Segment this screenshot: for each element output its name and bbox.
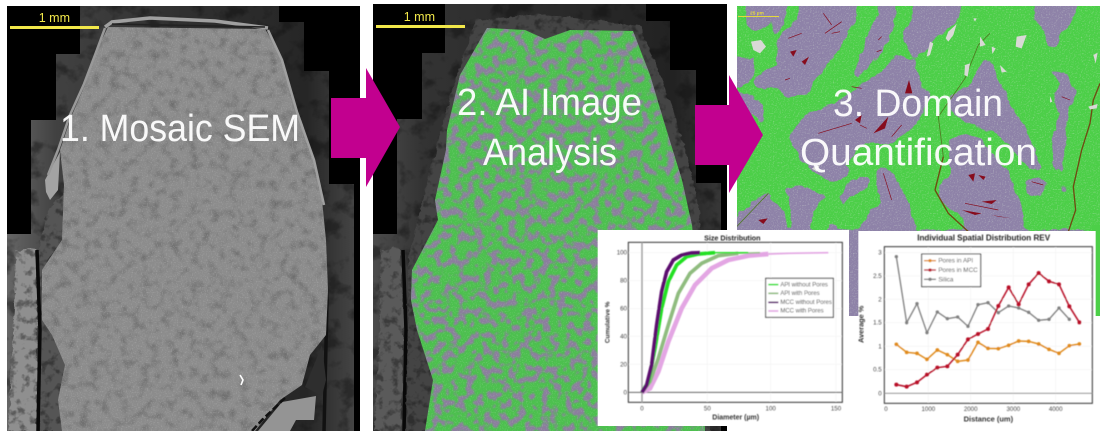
legend: API with Pores [780, 291, 820, 297]
scale bar: 25 µm, panel 3: 25 µm [750, 10, 764, 16]
legend: MCC with Pores [780, 309, 824, 315]
pores and cracks [737, 13, 1100, 232]
series: silica [895, 255, 1071, 334]
x axis labels: 100 [766, 405, 776, 412]
legend [922, 254, 981, 287]
outer grey strip [374, 248, 403, 431]
x axis labels [884, 406, 1063, 413]
y axis labels: 2 [878, 296, 882, 303]
rim of specimen [105, 18, 268, 28]
panel: mosaic SEM image [7, 6, 360, 431]
y axis labels: 0.5 [873, 367, 882, 374]
y axis labels: 0 [624, 389, 628, 396]
lower right fragment [258, 396, 316, 431]
grain overlay [737, 6, 1100, 316]
purple domains [725, 0, 1088, 320]
legend: Silica [938, 276, 954, 283]
heading: 2. AI Image Analysis: 2. AI Image [457, 82, 642, 124]
y axis title: Average % [857, 305, 866, 343]
legend [766, 278, 833, 317]
y axis labels [873, 250, 882, 397]
chart title: Individual Spatial Distribution REV [917, 234, 1051, 243]
legend: API without Pores [780, 282, 828, 288]
chart title: Size Distribution [704, 235, 761, 243]
heading: 3. Domain Quantification [800, 83, 1037, 174]
scale bar: 25 µm, panel 3 [738, 10, 779, 17]
scale bar: 1 mm, panel 2 [376, 10, 465, 28]
curve: API without pores [642, 253, 715, 392]
y axis labels: 1.5 [873, 320, 882, 327]
x axis labels: 4000 [1049, 406, 1063, 413]
x axis labels: 1000 [921, 406, 936, 413]
mosaic background tiles [7, 6, 354, 431]
segmented specimen [411, 28, 705, 431]
y axis labels: 2.5 [873, 273, 882, 280]
y axis labels [617, 250, 628, 396]
arrow: step 1 to step 2 [331, 68, 400, 187]
legend: Pores in API [938, 258, 973, 265]
y axis labels: 0 [878, 390, 882, 397]
rough dark edge band [36, 192, 65, 431]
silica particles [751, 18, 1098, 172]
x axis title: Diameter (µm) [712, 415, 759, 422]
y axis labels: 100 [617, 250, 628, 257]
y axis labels: 1 [878, 343, 882, 350]
x axis labels [640, 405, 842, 412]
y axis labels: 40 [620, 333, 628, 340]
heading: 2. AI Image Analysis [457, 82, 642, 174]
upper left sleeve [45, 152, 60, 200]
legend: MCC without Pores [780, 300, 832, 306]
x axis labels: 2000 [964, 406, 978, 413]
y axis labels: 20 [620, 361, 628, 368]
dark band around specimen [406, 14, 710, 431]
legend: Pores in MCC [938, 267, 978, 274]
curve: MCC without pores [642, 253, 700, 392]
x axis labels: 3000 [1006, 406, 1021, 413]
scale bar: 1 mm, panel 2: 1 mm [404, 10, 435, 24]
y axis labels: 80 [620, 278, 628, 285]
panel: AI image analysis [373, 4, 727, 431]
series: pores in MCC [894, 271, 1081, 389]
chart: individual spatial distribution REV [857, 231, 1096, 426]
right strip of green beside chart [1092, 225, 1100, 316]
x axis labels: 0 [640, 405, 644, 412]
scale bar: 1 mm, panel 1: 1 mm [39, 11, 70, 25]
heading: 3. Domain Quantification: Quantification [800, 132, 1037, 174]
mosaic background tiles [373, 4, 721, 431]
series: pores in API [894, 339, 1081, 363]
curve: MCC with pores [642, 254, 768, 392]
x axis labels: 50 [704, 405, 711, 412]
heading: 3. Domain Quantification: 3. Domain [833, 83, 1003, 125]
y axis title: Cumulative % [604, 301, 611, 343]
specimen [42, 27, 328, 431]
x axis labels: 150 [831, 405, 842, 412]
heading: 1. Mosaic SEM: 1. Mosaic SEM [60, 108, 300, 150]
heading: 2. AI Image Analysis: Analysis [483, 132, 617, 174]
chart: size distribution [598, 230, 849, 426]
arrow: step 2 to step 3 [695, 75, 763, 193]
scale bar: 1 mm, panel 1 [10, 11, 99, 29]
y axis labels: 60 [620, 306, 628, 313]
white flake [240, 375, 243, 385]
x axis labels: 0 [884, 406, 888, 413]
panel: domain quantification map [725, 0, 1100, 320]
curve: API with pores [642, 253, 738, 392]
outer lighter strip [8, 248, 38, 431]
y axis labels: 3 [878, 250, 882, 257]
x axis title: Distance (um) [964, 414, 1014, 423]
